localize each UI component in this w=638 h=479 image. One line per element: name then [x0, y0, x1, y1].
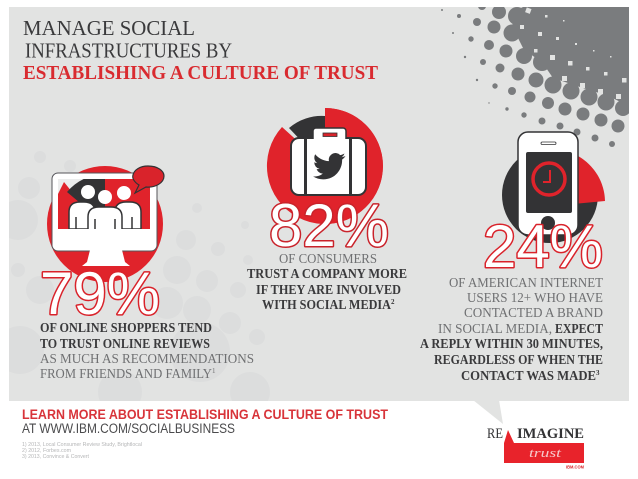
logo: reimagine trust: [487, 426, 584, 470]
footnotes: 2) 2012, Forbes.com: [22, 448, 71, 454]
text block: consumers: [247, 251, 407, 312]
text block: consumers: 2: [391, 298, 395, 306]
icon: monitor with people: [47, 166, 164, 282]
title: INFRASTRUCTURES BY: [25, 38, 232, 62]
stat: 79%: 79%: [40, 260, 160, 327]
text block: american internet users: CONTACT WAS MADE: [461, 368, 596, 383]
text block: consumers: WITH SOCIAL MEDIA: [262, 297, 391, 312]
title: MANAGE SOCIAL: [23, 16, 195, 40]
text block: american internet users: CONTACTED A BRAND: [464, 305, 603, 320]
text block: american internet users: [420, 275, 604, 383]
text block: online shoppers: FROM FRIENDS AND FAMILY: [40, 366, 212, 381]
logo: reimagine trust: RE: [487, 426, 503, 442]
icon: briefcase with twitter bird: [267, 108, 383, 224]
footnotes: 3) 2013, Convince & Convert: [22, 454, 89, 460]
text block: american internet users: 3: [596, 369, 600, 377]
text block: online shoppers: [40, 320, 254, 381]
icon: smartphone with clock: [502, 132, 605, 243]
title: ESTABLISHING A CULTURE OF TRUST: [23, 62, 378, 84]
text block: american internet users: A REPLY WITHIN 30 MINUTES,: [420, 336, 603, 351]
stat: 82%: 82%: [269, 192, 389, 259]
text block: american internet users: EXPECT: [555, 321, 603, 336]
footnotes: [22, 442, 142, 460]
text block: online shoppers: AS MUCH AS RECOMMENDATIONS: [40, 351, 254, 366]
text block: american internet users: OF AMERICAN INTERNET: [449, 275, 604, 290]
text block: online shoppers: TO TRUST ONLINE REVIEWS: [40, 336, 210, 351]
footnotes: 1) 2013, Local Consumer Review Study, Brightlocal: [22, 442, 142, 448]
text block: consumers: OF CONSUMERS: [279, 251, 377, 266]
icon: twitter bird: [313, 153, 345, 179]
stat: 24%: 24%: [483, 213, 603, 280]
halftone dot pattern: [441, 2, 631, 147]
logo: reimagine trust: IBM.COM: [566, 464, 584, 470]
call to action: [22, 407, 389, 436]
title: [23, 16, 378, 84]
text block: american internet users: IN SOCIAL MEDIA,: [438, 321, 552, 336]
call to action: LEARN MORE ABOUT ESTABLISHING A CULTURE OF TRUST: [22, 407, 389, 422]
call to action: AT WWW.IBM.COM/SOCIALBUSINESS: [22, 421, 235, 436]
text block: online shoppers: OF ONLINE SHOPPERS TEND: [40, 320, 212, 335]
text block: consumers: TRUST A COMPANY MORE: [247, 266, 407, 281]
logo: reimagine trust: trust: [529, 445, 562, 460]
text block: online shoppers: 1: [212, 367, 216, 375]
text block: american internet users: USERS 12+ WHO HAVE: [467, 290, 603, 305]
text block: american internet users: REGARDLESS OF WHEN THE: [434, 352, 603, 367]
logo: reimagine trust: IMAGINE: [517, 426, 584, 442]
text block: consumers: IF THEY ARE INVOLVED: [256, 282, 401, 297]
